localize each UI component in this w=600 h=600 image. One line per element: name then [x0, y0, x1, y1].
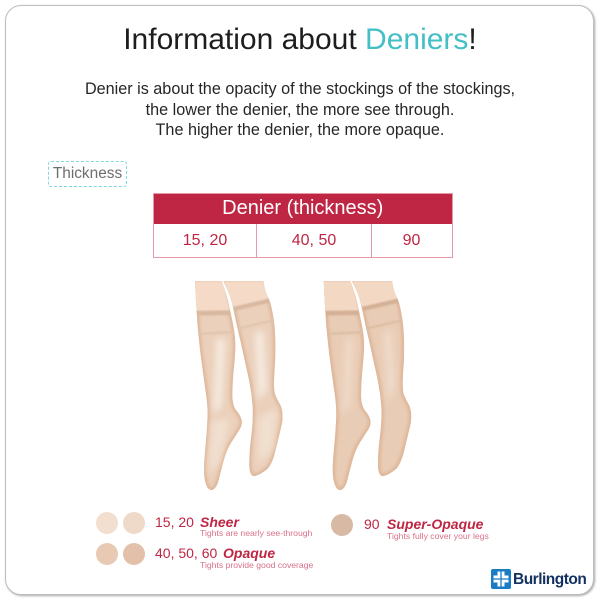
right pair of legs: [324, 281, 412, 490]
super-opaque name: Super-Opaque: [387, 516, 483, 532]
table header: Denier (thickness): [222, 197, 383, 219]
opaque description: Tights provide good coverage: [200, 560, 313, 570]
legend: 90 super-opaque: [364, 516, 489, 541]
table header: [154, 194, 452, 224]
logo wordmark: Burlington: [513, 571, 586, 588]
title: Information about Deniers!: [123, 23, 477, 56]
left pair of legs: [195, 281, 282, 490]
denier table: [153, 193, 452, 258]
icon: blue cross mark: [491, 569, 511, 589]
super-opaque number: 90: [364, 516, 380, 532]
cell: 90: 90: [403, 232, 420, 249]
thickness label: [48, 161, 127, 187]
cell: 15, 20: [154, 224, 257, 257]
thickness label: Thickness: [53, 165, 122, 182]
intro text: Denier is about the opacity of the stockings of the stockings,: [85, 80, 515, 98]
intro text: the lower the denier, the more see through.: [146, 100, 454, 118]
intro text: The higher the denier, the more opaque.: [156, 121, 444, 139]
legend swatch: sheer 20: [123, 512, 145, 534]
cell: 40, 50: 40, 50: [292, 232, 336, 249]
sheer description: Tights are nearly see-through: [200, 528, 312, 538]
sheer number: 15, 20: [155, 514, 194, 530]
legend swatch: super-opaque: [331, 514, 353, 536]
opaque number: 40, 50, 60: [155, 545, 217, 561]
super-opaque description: Tights fully cover your legs: [387, 531, 489, 541]
cell: 40, 50: [257, 224, 372, 257]
cell: 15, 20: 15, 20: [183, 232, 227, 249]
legend swatch: opaque 40: [96, 543, 118, 565]
legend: 15, 20 sheer: [155, 514, 312, 538]
sheer name: Sheer: [200, 514, 239, 530]
stocking legs illustration: [195, 281, 412, 490]
opaque name: Opaque: [223, 545, 275, 561]
intro text: [85, 80, 515, 139]
logo: Burlington: [491, 569, 586, 589]
legend swatch: opaque 50: [123, 543, 145, 565]
legend swatch: sheer 15: [96, 512, 118, 534]
legend: 40, 50, 60 opaque: [155, 545, 313, 570]
